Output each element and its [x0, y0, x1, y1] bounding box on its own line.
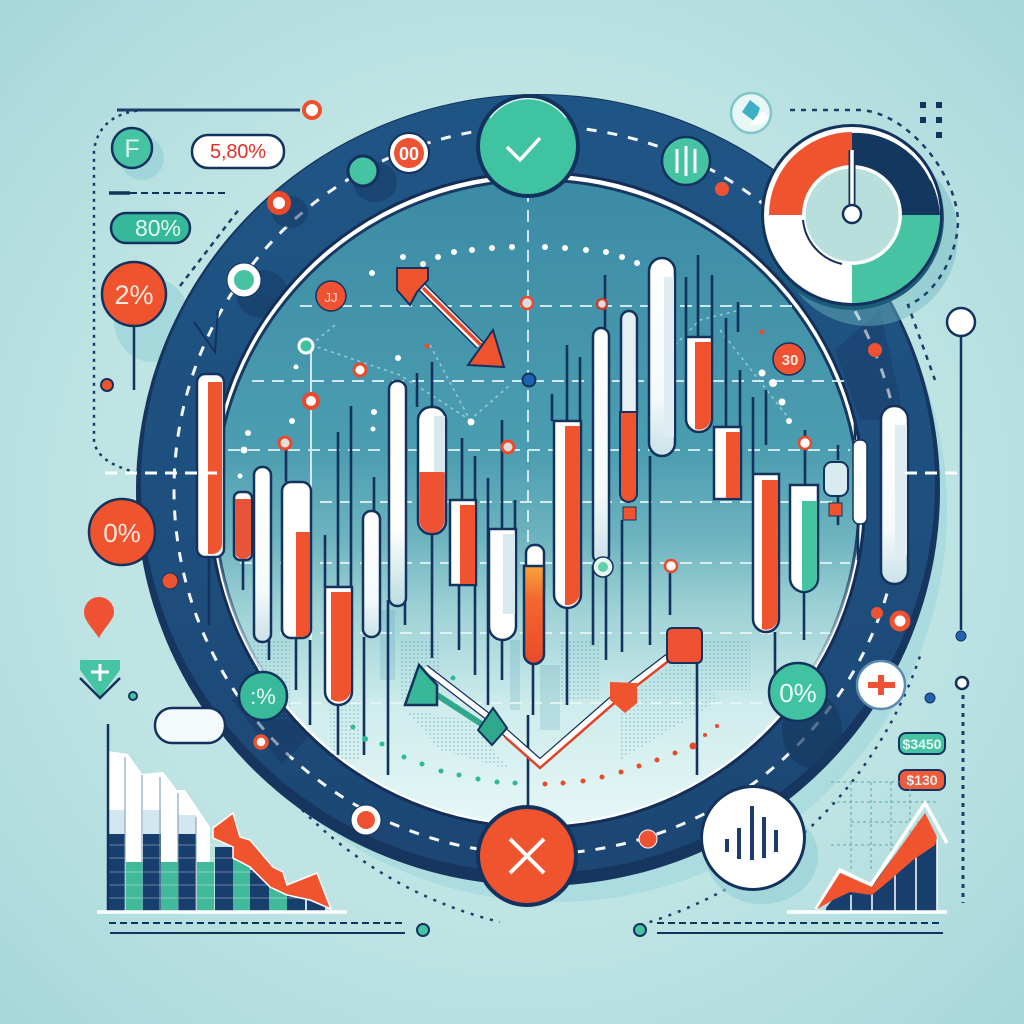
ring badges: 00	[399, 144, 419, 164]
panel: top-left annotations: 5,80%	[210, 141, 266, 163]
candle: 15	[649, 258, 675, 456]
icon: check button	[476, 94, 580, 198]
panel: top-right annotations	[731, 93, 975, 641]
red marker	[829, 503, 842, 516]
candle: 20	[824, 462, 848, 496]
chart: descending bars	[97, 724, 347, 912]
dashed grid lines	[228, 190, 850, 703]
candle: 7	[389, 381, 406, 606]
candle: 1	[197, 374, 224, 557]
panel: top-left annotations: 2%	[114, 280, 154, 310]
panel: inner chart disc	[208, 171, 866, 829]
panel: top-left annotations	[94, 102, 320, 472]
candle: 10	[489, 529, 516, 640]
candle: 12	[554, 421, 581, 608]
icon: bars button	[700, 785, 818, 904]
candle: 5	[325, 587, 352, 705]
chart: rising bars	[787, 782, 947, 912]
icon: plus badge	[857, 661, 905, 709]
candle: 14	[620, 311, 637, 520]
badge: green percent left: :%	[250, 684, 276, 709]
ring crossing dashes	[105, 472, 960, 474]
badge: green percent left	[239, 672, 287, 720]
candle: 8	[418, 407, 446, 534]
chart: gauge	[760, 124, 958, 326]
icon: green node	[593, 557, 613, 577]
inner chart markers: 30	[782, 352, 798, 369]
candle: 16	[686, 337, 712, 432]
dotted trend: green	[350, 676, 518, 786]
panel: left annotations: 0%	[103, 518, 141, 548]
arrow: green and red zigzag line	[405, 628, 702, 768]
panel: right annotations: $3450	[903, 736, 942, 752]
candle: 2	[234, 492, 252, 560]
panel: top-left annotations: F	[124, 135, 140, 163]
candle: 17	[714, 427, 741, 499]
candle: 19	[790, 485, 818, 592]
panel: navy ring	[136, 94, 947, 902]
candle: 4	[282, 482, 311, 638]
panel: top-left annotations: 80%	[135, 215, 181, 241]
candle: 21	[853, 440, 867, 524]
badge: green 0% right: 0%	[779, 678, 817, 708]
candle: 11	[524, 545, 544, 664]
candlestick wicks	[209, 255, 858, 820]
dotted white arcs	[238, 244, 792, 478]
candle: 6	[363, 511, 380, 637]
dotted trend: red	[542, 724, 719, 786]
footer lines	[109, 923, 943, 936]
candle: 9	[450, 500, 476, 585]
inner chart markers	[279, 281, 811, 572]
icon: cross button	[476, 805, 578, 907]
panel: outer dashed orbit	[200, 640, 922, 925]
panel: left annotations	[80, 499, 225, 743]
candle: 18	[753, 474, 779, 632]
inner chart markers: JJ	[324, 290, 338, 305]
candle: 13	[593, 328, 609, 563]
candle: 22	[881, 406, 908, 584]
badge: green 0% right	[769, 663, 842, 768]
panel: right annotations	[899, 677, 968, 903]
candle: 3	[254, 467, 271, 642]
ring badges	[194, 133, 908, 848]
arrow: red down arrow	[397, 268, 504, 367]
panel: right annotations: $130	[906, 772, 938, 788]
